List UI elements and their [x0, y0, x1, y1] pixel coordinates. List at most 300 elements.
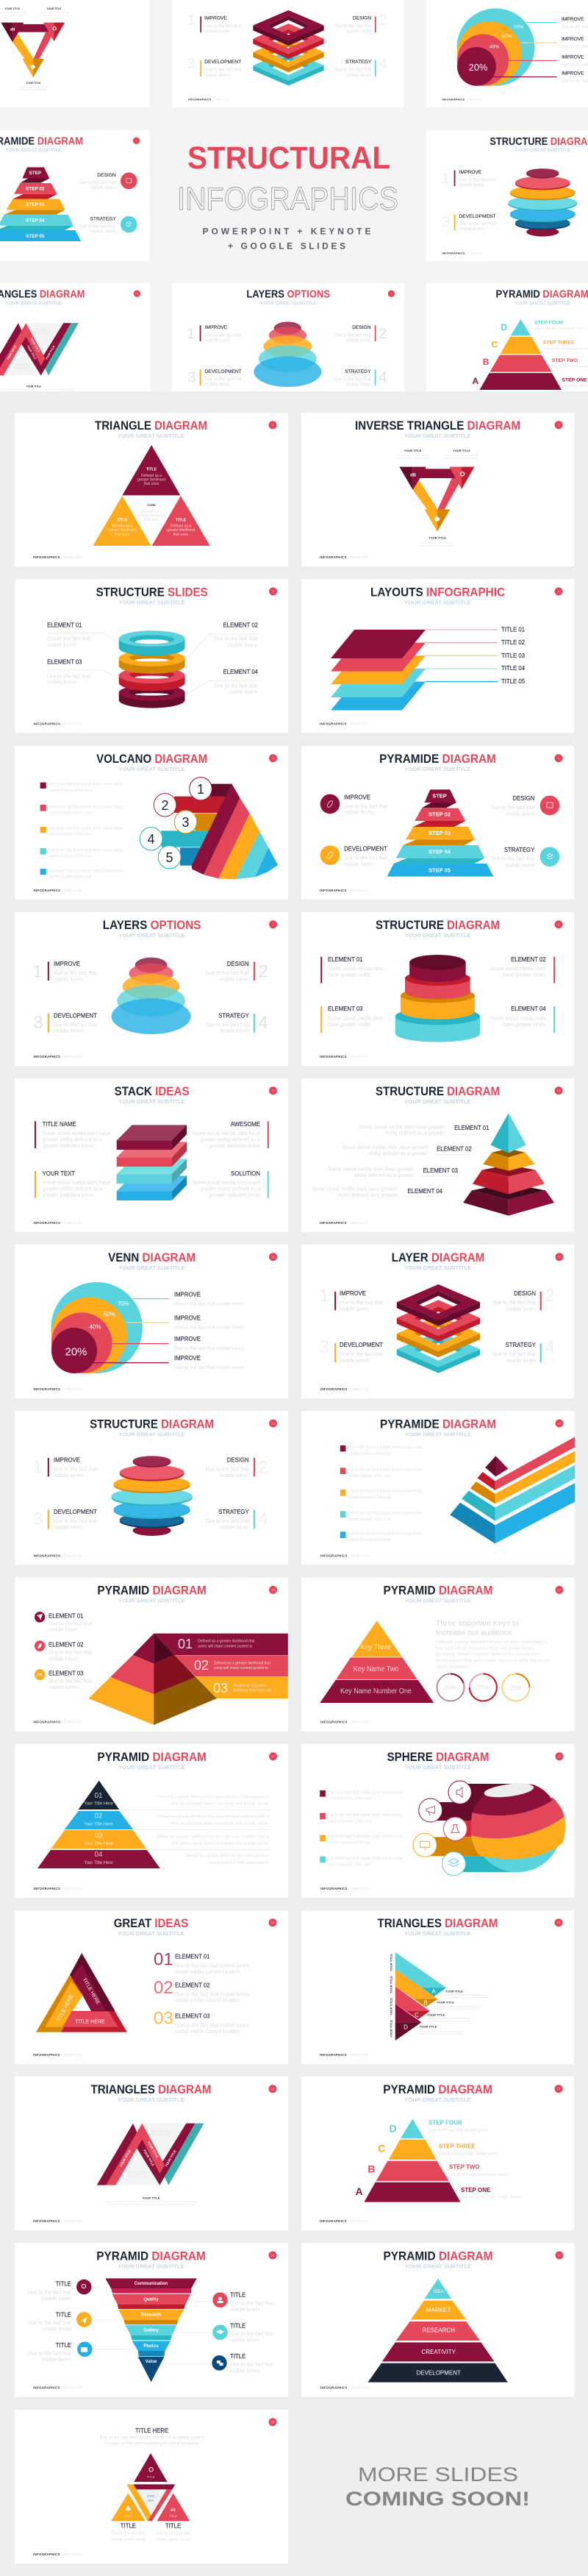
N shaped ribbon: Defined as a greater — [127, 2171, 147, 2174]
page badge: 1 — [272, 423, 274, 427]
closing message: COMING SOON! — [345, 2488, 530, 2510]
side labels: Some social media sites have — [43, 1131, 110, 1136]
page badge — [269, 1918, 276, 1926]
heading — [103, 918, 201, 939]
element labels: mobile lorem — [49, 1685, 78, 1690]
heading: VOLCANO DIAGRAM — [96, 752, 207, 766]
side labels: mobile lorem — [54, 977, 83, 982]
heading: TRIANGLES DIAGRAM — [378, 1916, 498, 1930]
level labels: Your Title Here — [84, 1861, 113, 1865]
side labels: Due to the fact that — [28, 2290, 71, 2295]
diamond rings — [334, 1284, 542, 1373]
side labels: have greater virility — [328, 973, 371, 978]
triangle labels — [108, 468, 195, 537]
side labels: Some social media sites — [328, 967, 384, 972]
footer: INFOGRAPHICS | TEMPLATE — [34, 1721, 82, 1724]
side labels — [344, 794, 535, 868]
heading: YOUR GREAT SUBTITLE — [405, 1264, 471, 1271]
letters: A — [356, 2185, 363, 2197]
heading: YOUR GREAT SUBTITLE — [118, 1098, 185, 1105]
triangles: IDEA — [148, 2499, 154, 2502]
triangles: TITLE — [124, 2514, 132, 2518]
level labels: RESEARCH — [422, 2327, 455, 2334]
letters: D — [389, 2122, 397, 2134]
footer: INFOGRAPHICS | TEMPLATE — [320, 1554, 369, 1557]
side labels: TITLE — [56, 2342, 71, 2349]
band text: Defined as a greater — [233, 1684, 266, 1688]
bottom labels: Due to the fact that — [156, 2532, 191, 2536]
heading — [97, 1584, 207, 1604]
footer: INFOGRAPHICS | TEMPLATE — [33, 2053, 82, 2057]
legend text: current location of the user — [348, 1474, 392, 1479]
labels: IMPROVE — [174, 1291, 201, 1298]
page badge — [554, 2085, 563, 2093]
legend text: Due to the fact that mobile lorem social media — [328, 1790, 403, 1795]
legend text: Due to the fact that mobile lorem social media — [49, 783, 123, 787]
funnel labels: Quality — [143, 2297, 159, 2302]
footer: INFOGRAPHICS | TEMPLATE — [320, 1221, 368, 1225]
heading: YOUR GREAT SUBTITLE — [118, 1930, 184, 1937]
cylinders — [320, 955, 555, 1042]
N shaped ribbon — [97, 2124, 204, 2185]
legend text: current location of the user — [328, 1840, 372, 1845]
triangles: TITLE — [169, 2514, 177, 2518]
circle icons — [81, 2284, 224, 2366]
footer: INFOGRAPHICS | TEMPLATE — [34, 1887, 82, 1890]
footer: INFOGRAPHICS | TEMPLATE — [33, 555, 82, 559]
subtitle: platforms: + GOOGLE SLIDES — [228, 241, 345, 252]
band text: users will share content posted to — [214, 1666, 268, 1671]
page badge — [269, 587, 277, 596]
triangle labels: that uses — [144, 482, 159, 486]
percentages: 50% — [104, 1312, 115, 1318]
caption: Defined as a greater likelihood that users will share content posted to their social network many — [104, 2200, 198, 2203]
side labels: DEVELOPMENT — [54, 1509, 97, 1515]
four level pyramid — [37, 1781, 270, 1868]
page badge — [269, 2251, 276, 2260]
legend text: Due to the fact that mobile lorem social media — [49, 826, 123, 830]
legend text: current location of the user — [348, 1518, 392, 1522]
pyramid labels: Key Name Number One — [340, 1687, 412, 1696]
paragraph: Increase our audience — [436, 1628, 512, 1637]
side labels: Some social media sites have — [192, 1131, 260, 1136]
legend text: current location of the user — [328, 1862, 372, 1867]
heading — [90, 1417, 214, 1437]
side labels: greater virility defined as a — [200, 1187, 260, 1192]
side labels: DESIGN — [227, 1457, 249, 1464]
side labels: TITLE — [56, 2281, 71, 2288]
side labels: greater websites know — [43, 1193, 94, 1198]
labels: YOUR TITLE — [404, 449, 422, 452]
page badge: 16 — [558, 1588, 562, 1592]
funnel labels — [135, 2282, 168, 2364]
labels: TITLE 04 — [501, 665, 526, 672]
element labels: ELEMENT 01 — [49, 1612, 84, 1619]
side labels: 3 — [33, 1013, 43, 1033]
side labels: greater websites know — [43, 1144, 94, 1149]
element labels: ELEMENT 02 — [49, 1642, 84, 1648]
progress rings — [437, 1674, 529, 1701]
footer: INFOGRAPHICS | TEMPLATE — [34, 889, 82, 892]
numbered elements: 03 — [154, 2009, 173, 2029]
step labels: Due to the fact that mobile lorem — [429, 2128, 488, 2132]
legend squares — [320, 1790, 326, 1862]
page badge: 21 — [271, 2087, 275, 2091]
side labels: 3 — [319, 1337, 329, 1357]
legend text: current location of the user — [49, 789, 93, 793]
side labels: Due to the fact that — [54, 1519, 97, 1524]
labels: virility defined as a greater — [354, 1173, 415, 1178]
band text: Defined as a greater likelihood that — [214, 1662, 271, 1666]
heading: VENN DIAGRAM — [108, 1250, 196, 1264]
heading: SPHERE DIAGRAM — [387, 1750, 490, 1764]
side labels: greater websites know — [209, 1193, 261, 1198]
page badge: 9 — [272, 1089, 274, 1092]
page badge: 2 — [558, 423, 560, 427]
bottom labels: mobile lorem social — [156, 2538, 191, 2542]
caption: social media sites provide specific functionality to help users share content to businesses — [107, 2203, 195, 2206]
triangle labels: greater likelihood — [137, 478, 165, 483]
paragraph — [436, 1619, 550, 1669]
nested circles — [51, 1282, 169, 1373]
labels: virility defined as a greater — [384, 1131, 445, 1136]
side labels: DESIGN — [512, 795, 534, 802]
labels: ELEMENT 03 — [423, 1167, 458, 1174]
thumbnail: inverse triangle — [0, 0, 149, 107]
side labels: ELEMENT 04 — [511, 1006, 546, 1012]
step labels: Due to the fact that mobile lorem — [449, 2173, 509, 2177]
page badge: 12 — [558, 1255, 562, 1259]
triangle labels: TITLE — [176, 518, 187, 522]
side labels: YOUR TEXT — [43, 1170, 75, 1177]
side labels: Some social media sites — [490, 967, 546, 972]
slide 3: structure slides — [15, 579, 288, 733]
heading: PYRAMID DIAGRAM — [96, 2249, 206, 2263]
element labels: Due to the fact that — [49, 1651, 92, 1656]
labels: users will share content posted to — [421, 544, 454, 547]
heading: STRUCTURE DIAGRAM — [376, 918, 500, 932]
slide 23: pyramid diagram funnel — [15, 2243, 288, 2397]
triangle labels: TITLE HERE — [75, 2020, 105, 2024]
labels: mobile lorem — [47, 643, 76, 648]
legend text: current location of the user — [49, 875, 93, 880]
side labels: share content posted to their social network — [427, 2020, 470, 2023]
heading: YOUR GREAT SUBTITLE — [404, 1930, 471, 1937]
vertical titles — [390, 1954, 392, 2038]
heading: YOUR GREAT SUBTITLE — [405, 1764, 471, 1771]
letters — [404, 1988, 436, 2031]
labels: Defined as a greater likelihood that — [395, 454, 430, 457]
labels: IMPROVE — [174, 1314, 201, 1321]
side labels: Due to the fact that — [206, 971, 249, 976]
side labels: SOLUTION — [231, 1170, 260, 1177]
labels: TITLE 05 — [501, 678, 526, 685]
page badge: 5 — [272, 756, 274, 760]
sphere with connectors — [413, 1781, 565, 1876]
page badge — [269, 754, 277, 762]
page badge: 20 — [557, 1921, 561, 1924]
side labels: Due to the fact that — [344, 855, 387, 861]
labels: ELEMENT 03 — [47, 659, 82, 666]
page badge: 10 — [557, 1089, 561, 1092]
thumbnail: pyramid steps — [426, 283, 588, 414]
side labels: Due to the fact that — [206, 1467, 249, 1473]
footer: INFOGRAPHICS | TEMPLATE — [34, 1221, 82, 1225]
side labels: 3 — [33, 1509, 43, 1529]
labels: ELEMENT 02 — [223, 622, 258, 628]
heading: PYRAMID DIAGRAM — [384, 1584, 492, 1598]
side labels: mobile lorem — [220, 1525, 249, 1530]
level labels: Your Title Here — [84, 1802, 113, 1807]
side labels: ELEMENT 03 — [328, 1006, 363, 1012]
side labels: YOUR TITLE — [445, 1989, 463, 1993]
funnel labels: Value — [146, 2360, 157, 2364]
labels: ELEMENT 02 — [437, 1145, 472, 1152]
labels: IMPROVE — [174, 1336, 201, 1342]
side labels: mobile lorem — [344, 811, 373, 816]
page badge: 8 — [558, 922, 560, 926]
step labels: STEP THREE — [439, 2143, 476, 2149]
labels — [312, 1125, 490, 1198]
legend text: current location of the user — [328, 1819, 372, 1824]
slide 17: pyramid diagram four levels — [15, 1744, 288, 1898]
triangles — [111, 2453, 190, 2521]
side labels: have greater virility — [328, 1022, 371, 1028]
labels: ELEMENT 01 — [47, 622, 82, 628]
key pyramid — [320, 1620, 434, 1703]
descriptions: their social network many social media sites provide specific — [171, 1821, 269, 1826]
caption: YOUR TITLE — [143, 2196, 160, 2199]
labels: Due to the fact that — [214, 637, 257, 642]
step labels: STEP 05 — [429, 867, 451, 874]
triangle labels: TITLE — [146, 468, 157, 472]
page badge — [556, 1253, 563, 1261]
side labels: share content posted to their social network — [437, 2007, 479, 2010]
footer: INFOGRAPHICS | TEMPLATE — [33, 2552, 82, 2556]
slide 1: triangle diagram — [15, 413, 288, 566]
stacked boxes — [35, 1121, 269, 1200]
slide 24: pyramid diagram five levels — [301, 2243, 575, 2397]
side labels: 1 — [319, 1286, 329, 1306]
level labels: 04 — [94, 1851, 103, 1859]
heading — [96, 585, 208, 605]
side labels: Due to the fact that — [54, 1467, 97, 1473]
numbered elements: social media current location — [175, 1999, 240, 2004]
side labels: 1 — [32, 1458, 43, 1478]
heading: GREAT IDEAS — [114, 1916, 188, 1930]
triangle labels: Defined as a — [141, 510, 162, 514]
numbered elements: Due to the fact that mobile lorem — [175, 1992, 249, 1997]
side labels: greater virility defined as a — [200, 1138, 260, 1143]
page badge: 3 — [272, 589, 274, 593]
triangles diagram — [93, 445, 210, 546]
page badge — [556, 1752, 563, 1760]
level labels: 01 — [94, 1792, 103, 1800]
band text: likelihood that users will — [233, 1689, 271, 1693]
vertical titles: YOUR TITLE — [390, 1976, 392, 1993]
page badge — [269, 2418, 276, 2426]
letters: C — [378, 2143, 385, 2155]
heading: PYRAMID DIAGRAM — [384, 2249, 492, 2263]
inverse triangle — [399, 467, 474, 532]
step labels: STEP FOUR — [429, 2119, 462, 2126]
side labels — [32, 1457, 268, 1530]
heading — [376, 918, 500, 939]
side labels — [328, 956, 546, 1028]
page badge: 17 — [271, 1754, 275, 1758]
slide 9: stack ideas — [15, 1078, 288, 1232]
intro text — [100, 2427, 204, 2447]
triangle labels: CORE — [147, 503, 156, 507]
heading — [370, 585, 505, 605]
side labels: STRATEGY — [218, 1509, 249, 1515]
page badge — [269, 1752, 277, 1760]
pyramid labels — [340, 1644, 412, 1696]
side labels: greater virility defined as a — [43, 1138, 102, 1143]
heading: LAYOUTS INFOGRAPHIC — [370, 585, 505, 599]
level labels: IDEA — [434, 2290, 444, 2294]
N shaped ribbon: will share content — [129, 2175, 146, 2178]
legend text: Due to the fact that mobile lorem social media — [348, 1445, 423, 1450]
labels: mobile lorem — [228, 643, 258, 648]
heading: STACK IDEAS — [115, 1084, 190, 1098]
slide 2: inverse triangle diagram — [301, 413, 574, 566]
stepped pyramid — [320, 789, 559, 877]
page badge: 15 — [271, 1588, 275, 1592]
side labels: DEVELOPMENT — [54, 1012, 97, 1019]
heading: YOUR GREAT SUBTITLE — [118, 1264, 185, 1271]
step labels: STEP 03 — [429, 830, 451, 836]
footer: INFOGRAPHICS | TEMPLATE — [320, 2053, 368, 2057]
triangle labels: greater likelihood — [137, 514, 165, 519]
side labels: 4 — [545, 1337, 555, 1357]
side labels: Due to the fact that — [54, 971, 97, 976]
labels: mobile lorem — [228, 690, 258, 695]
side labels: YOUR TITLE — [427, 2013, 445, 2017]
heading: YOUR GREAT SUBTITLE — [118, 1431, 185, 1437]
vertical titles: YOUR TITLE — [390, 1954, 392, 1971]
side labels: greater websites know — [209, 1144, 261, 1149]
legend text: Due to the fact that mobile lorem social media — [348, 1468, 423, 1473]
step labels: STEP 02 — [429, 811, 451, 818]
heading: YOUR GREAT SUBTITLE — [404, 599, 471, 605]
icons — [326, 800, 553, 860]
labels: ELEMENT 01 — [454, 1125, 490, 1131]
descriptions: their social network many social media sites provide specific — [171, 1842, 269, 1846]
side labels: Due to the fact that — [491, 805, 534, 811]
level labels — [84, 1792, 113, 1865]
five level pyramid — [368, 2279, 508, 2383]
labels: Due to the fact that — [47, 674, 90, 679]
triangles: TITLE — [147, 2475, 155, 2479]
triangle labels: that uses — [115, 533, 130, 537]
side labels: Some social media sites have — [192, 1181, 260, 1186]
translucent layers — [48, 958, 255, 1034]
side labels: STRATEGY — [218, 1012, 249, 1019]
heading: YOUR GREAT SUBTITLE — [404, 932, 471, 939]
subtitle: platforms: POWERPOINT + KEYNOTE — [203, 227, 370, 237]
side labels: DESIGN — [514, 1290, 536, 1297]
side labels: Defined as a greater likelihood that users will — [427, 2017, 471, 2020]
side labels: mobile lorem — [344, 862, 373, 867]
side labels — [28, 2281, 273, 2374]
side labels: Defined as a greater likelihood that users will — [445, 1993, 490, 1996]
step labels: Due to the fact that mobile lorem — [461, 2196, 520, 2200]
labels: Defined as a greater likelihood that — [420, 541, 454, 544]
intro text: location of the user marketing in social networks — [105, 2442, 198, 2447]
legend text — [328, 1790, 403, 1867]
side labels: mobile lorem — [506, 1307, 536, 1312]
step labels — [429, 2119, 520, 2200]
side labels: mobile lorem — [340, 1359, 369, 1364]
disk stack — [48, 1456, 255, 1536]
side labels: Defined as a greater likelihood that users will — [437, 2005, 481, 2008]
heading: PYRAMID DIAGRAM — [97, 1584, 207, 1598]
pyramid labels: Key Three — [360, 1644, 392, 1652]
heading: YOUR GREAT SUBTITLE — [118, 2263, 184, 2269]
numbered elements: Due to the fact that mobile lorem — [175, 2024, 249, 2029]
heading: TRIANGLE DIAGRAM — [95, 419, 207, 433]
labels: Some social media sites have greater — [312, 1186, 398, 1192]
letters: C — [415, 2012, 419, 2018]
side labels: DESIGN — [227, 961, 249, 967]
heading — [384, 1584, 492, 1604]
page badge: 14 — [558, 1421, 562, 1425]
element labels: mobile lorem — [49, 1628, 78, 1633]
level labels: CREATIVITY — [421, 2349, 456, 2355]
intro text: Due to the fact that mobile lorem social media current — [100, 2436, 204, 2440]
side labels: IMPROVE — [344, 794, 370, 800]
closing message — [345, 2463, 530, 2510]
heading: YOUR GREAT SUBTITLE — [118, 2096, 184, 2103]
legend text — [348, 1445, 423, 1543]
legend text: current location of the user — [49, 833, 93, 837]
heading: PYRAMID DIAGRAM — [383, 2082, 492, 2096]
side labels: mobile lorem — [506, 1359, 536, 1364]
side labels: ELEMENT 02 — [511, 956, 546, 963]
page badge: 25 — [271, 2420, 275, 2424]
heading: YOUR GREAT SUBTITLE — [405, 2263, 471, 2269]
page badge — [269, 1253, 277, 1261]
side labels: mobile lorem — [505, 811, 534, 816]
vertical titles: YOUR TITLE — [390, 1998, 392, 2015]
bottom labels: mobile lorem social — [110, 2538, 146, 2542]
interlocked triangle — [36, 1953, 127, 2032]
triangle labels: Defined as a — [112, 524, 132, 529]
thumbnail: triangles — [0, 283, 150, 414]
side labels: 1 — [32, 961, 43, 981]
thumbnail: structure — [426, 130, 588, 261]
page badge — [554, 587, 563, 596]
corner pyramid — [340, 1437, 575, 1543]
side labels: mobile lorem — [340, 1307, 369, 1312]
header background — [0, 0, 588, 391]
page badge: 4 — [558, 589, 560, 593]
labels — [501, 627, 526, 685]
numbered elements: social media current location — [175, 2029, 240, 2035]
side labels: STRATEGY — [504, 847, 535, 853]
step numbers: 2 — [161, 798, 169, 813]
labels — [174, 1291, 245, 1370]
side labels: IMPROVE — [54, 1457, 80, 1464]
heading — [379, 752, 496, 772]
band text: 01 — [178, 1637, 193, 1651]
element labels: mobile lorem — [49, 1657, 78, 1662]
side labels — [32, 961, 268, 1034]
N shaped ribbon: Defined as a greater — [151, 2130, 171, 2132]
side labels: mobile lorem — [42, 2358, 71, 2363]
cascading triangles — [395, 1952, 446, 2040]
